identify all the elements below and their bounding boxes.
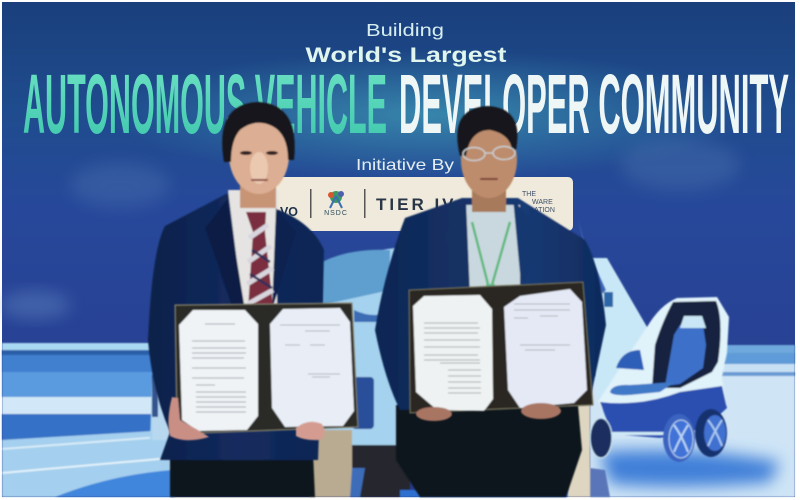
left page lines — [424, 323, 481, 393]
autonomous pod vehicle — [578, 220, 729, 462]
shirt — [466, 205, 520, 296]
right hand — [521, 403, 561, 419]
heading: World's Largest: World's Largest — [306, 44, 506, 67]
pod tub — [600, 386, 727, 438]
lapel — [445, 200, 470, 295]
pod shell — [598, 297, 729, 425]
logo panel — [275, 177, 573, 231]
left page — [413, 295, 493, 411]
pod support structure — [578, 220, 647, 400]
background concept car — [150, 248, 610, 497]
pod seat frame — [652, 301, 721, 388]
wheel: front — [663, 414, 695, 462]
neck and face — [240, 178, 276, 208]
logo panel: THE — [522, 191, 536, 198]
person: right signatory — [375, 106, 606, 497]
left page — [179, 310, 258, 431]
eyes and mouth — [240, 151, 252, 155]
jacket — [148, 193, 324, 460]
road and barriers: left — [2, 343, 175, 497]
left page lines — [192, 324, 246, 412]
right page — [504, 289, 587, 408]
folder cover — [175, 303, 358, 434]
right page lines — [280, 325, 340, 377]
folder cover — [409, 282, 593, 413]
logo: NSDC: NSDC — [324, 210, 348, 217]
hair — [457, 106, 517, 156]
pod armrest — [616, 350, 644, 370]
right hand — [296, 422, 325, 440]
lapel — [205, 200, 245, 310]
necktie — [246, 212, 273, 309]
left document folder — [168, 303, 358, 440]
hair — [222, 102, 295, 162]
left hand — [168, 397, 209, 440]
wheel: left — [590, 418, 612, 458]
trousers — [170, 430, 315, 497]
logo: Tier IV: TIER IV — [376, 195, 457, 214]
left hand — [416, 407, 452, 421]
neck and face — [472, 182, 506, 212]
lanyard — [472, 222, 510, 292]
heading: Building: Building — [366, 20, 444, 40]
logo panel: ATION — [534, 207, 555, 214]
logo panel: VO — [280, 204, 298, 219]
logo: NSDC — [324, 191, 348, 217]
glasses — [463, 146, 515, 160]
road and barriers: right — [590, 345, 795, 497]
jacket — [375, 198, 606, 410]
logo panel: WARE — [532, 199, 553, 206]
shirt — [228, 190, 278, 310]
person: left signatory — [148, 102, 324, 497]
trousers — [396, 405, 582, 497]
right page lines — [514, 304, 570, 350]
right document folder — [409, 282, 593, 421]
pod seat — [665, 325, 706, 386]
wheel: rear — [695, 409, 727, 457]
initiative label: Initiative By — [356, 157, 454, 174]
road shadow — [600, 450, 780, 487]
right page — [270, 308, 354, 427]
